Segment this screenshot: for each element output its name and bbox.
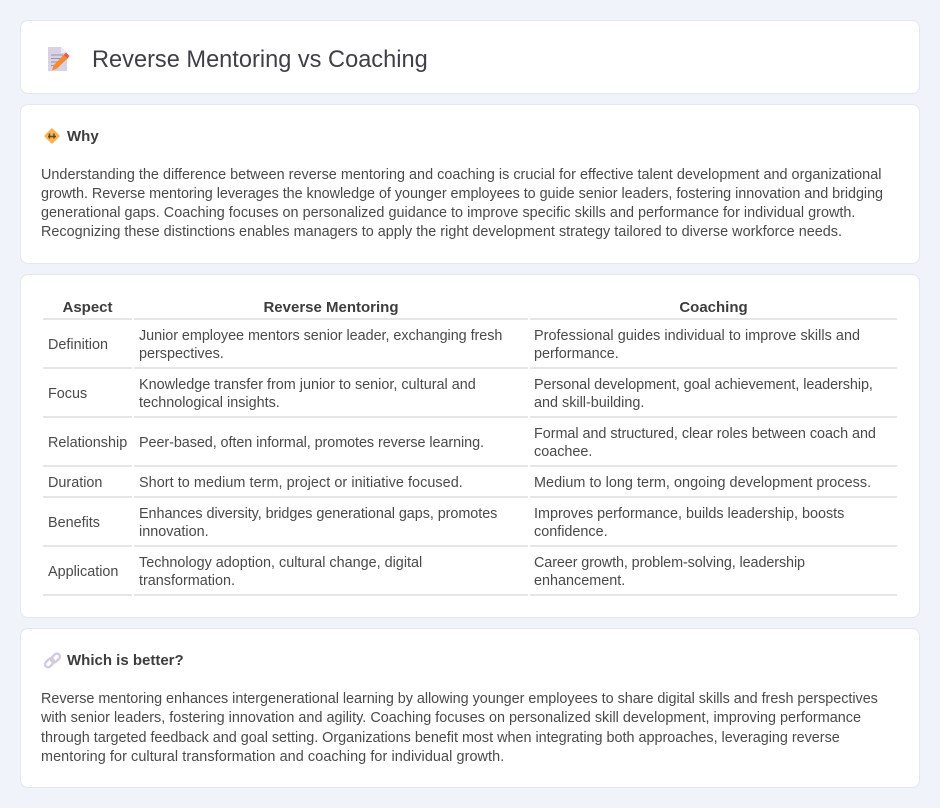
- icon: memo with pencil: [48, 47, 70, 71]
- title: Reverse Mentoring vs Coaching: [92, 47, 428, 73]
- row: focus: technological insights.: [139, 395, 280, 411]
- text block: which is better paragraph: Reverse mentoring enhances intergenerational learning by allowing younger employees to share digital skills and fresh perspectives: [41, 691, 878, 707]
- row: definition: Junior employee mentors senior leader, exchanging fresh: [139, 328, 502, 344]
- row: application: Career growth, problem-solving, leadership: [534, 555, 805, 571]
- row: focus: Knowledge transfer from junior to senior, cultural and: [139, 377, 476, 393]
- row: relationship: [48, 426, 876, 460]
- row: duration: Duration: [48, 475, 102, 491]
- row: duration: Short to medium term, project or initiative focused.: [139, 475, 463, 491]
- row: benefits: innovation.: [139, 524, 209, 540]
- text block: why paragraph: generational gaps. Coaching focuses on personalized guidance to improve specific skills and performance for individual growth.: [41, 205, 855, 221]
- text block: which is better paragraph: through targeted feedback and goal setting. Organizations benefit most when integrating both approaches, leveraging reverse: [41, 730, 840, 746]
- row: relationship: Relationship: [48, 435, 127, 451]
- row: benefits: Improves performance, builds leadership, boosts: [534, 506, 844, 522]
- row: definition: perspectives.: [139, 346, 224, 362]
- heading: which is better: Which is better?: [67, 652, 184, 669]
- row: application: Application: [48, 564, 118, 580]
- row: application: transformation.: [139, 573, 235, 589]
- row: focus: Personal development, goal achievement, leadership,: [534, 377, 873, 393]
- panel: why: [20, 104, 920, 264]
- row: definition: Definition: [48, 337, 108, 353]
- row: benefits: [48, 506, 844, 540]
- row: application: [48, 555, 805, 589]
- heading: why: Why: [67, 128, 99, 145]
- row: duration: Medium to long term, ongoing development process.: [534, 475, 871, 491]
- icon: children crossing sign: [44, 128, 60, 144]
- row: benefits: Enhances diversity, bridges generational gaps, promotes: [139, 506, 497, 522]
- row: focus: [48, 377, 873, 411]
- row: definition: [48, 328, 860, 362]
- panel: comparison table: [20, 274, 920, 618]
- row: duration: [48, 475, 871, 491]
- row: application: Technology adoption, cultural change, digital: [139, 555, 422, 571]
- row: benefits: confidence.: [534, 524, 608, 540]
- icon: link: [44, 652, 62, 668]
- panel: which is better: [20, 628, 920, 788]
- text block: why paragraph: growth. Reverse mentoring leverages the knowledge of younger employees to guide senior leaders, fostering innovation and bridging: [41, 186, 883, 202]
- text block: which is better paragraph: [41, 691, 878, 765]
- table header: Aspect: [62, 299, 113, 316]
- text block: why paragraph: Understanding the difference between reverse mentoring and coaching is crucial for effective talent development and organizational: [41, 167, 881, 183]
- row: definition: Professional guides individual to improve skills and: [534, 328, 860, 344]
- text block: which is better paragraph: with senior leaders, fostering innovation and agility. Coaching focuses on personalized skill development, improving performance: [41, 710, 861, 726]
- row: relationship: Formal and structured, clear roles between coach and: [534, 426, 876, 442]
- table header: Coaching: [679, 299, 748, 316]
- row: definition: performance.: [534, 346, 619, 362]
- row: focus: Focus: [48, 386, 87, 402]
- table header: [62, 299, 748, 316]
- text block: which is better paragraph: mentoring for cultural transformation and coaching for individual growth.: [41, 749, 504, 765]
- row: application: enhancement.: [534, 573, 625, 589]
- panel: header: [20, 20, 920, 94]
- row: relationship: Peer-based, often informal, promotes reverse learning.: [139, 435, 484, 451]
- row: relationship: coachee.: [534, 444, 592, 460]
- row: focus: and skill-building.: [534, 395, 644, 411]
- text block: why paragraph: Recognizing these distinctions enables managers to apply the right development strategy tailored to diverse workforce needs.: [41, 224, 842, 240]
- row: benefits: Benefits: [48, 515, 100, 531]
- text block: why paragraph: [41, 167, 883, 240]
- table header: Reverse Mentoring: [263, 299, 399, 316]
